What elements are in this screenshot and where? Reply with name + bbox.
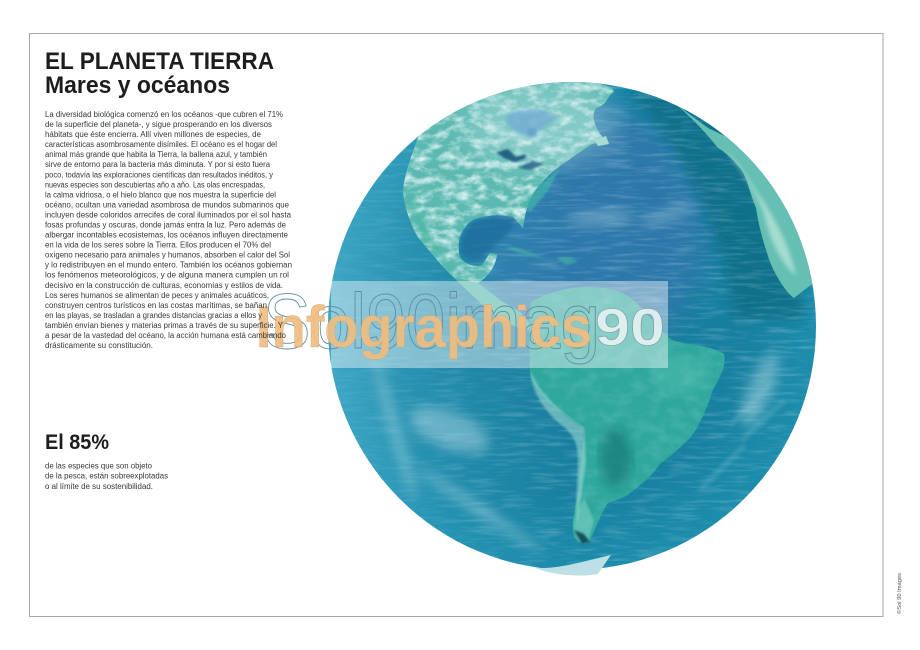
body text: la calma vidriosa, o el hielo blanco que nos muestra la superficie del <box>45 190 276 199</box>
cloud streaks <box>370 199 786 556</box>
body text: incluyen desde coloridos arrecifes de coral iluminados por el sol hasta <box>45 210 292 220</box>
Central America <box>453 277 535 330</box>
photo credit: ©Sol 90 Images <box>896 573 903 614</box>
body text: Los seres humanos se alimentan de peces y animales acuáticos, <box>45 291 269 300</box>
body text: hábitats que éste encierra. Allí viven millones de especies, de <box>45 130 261 139</box>
Andes coast light <box>530 370 586 524</box>
west coast green <box>403 190 460 282</box>
body text: decisivo en la construcción de culturas, economías y estilos de vida. <box>45 281 283 290</box>
watermark orange wordmark: Infographics <box>256 295 592 360</box>
Cuba and Caribbean <box>506 247 578 265</box>
lower right light streaks <box>700 385 785 490</box>
body text: poco, todavía las exploraciones científicas dan resultados inéditos, y <box>45 170 273 179</box>
Africa and Europe limb <box>678 106 812 298</box>
North America <box>400 80 620 290</box>
watermark white numerals: 90 <box>595 299 665 357</box>
statistic heading: El 85% <box>45 431 109 454</box>
title <box>45 48 274 99</box>
body text: nuevas especies son descubiertas año a año. Las olas encrespadas, <box>45 180 265 189</box>
Antarctica <box>535 555 611 576</box>
body text: albergar incontables ecosistemas, los océanos influyen directamente <box>45 230 288 240</box>
body text: a pesar de la vastedad del océano, la acción humana está cambiando <box>45 331 287 340</box>
body text: en las playas, se trasladan a grandes distancias gracias a ellos y <box>45 311 262 320</box>
body text: de la superficie del planeta-, y sigue prosperando en los diversos <box>45 120 272 129</box>
statistic caption <box>45 462 168 491</box>
body text: La diversidad biológica comenzó en los océanos -que cubren el 71% <box>45 110 283 119</box>
body text <box>45 110 292 350</box>
body text: características asombrosamente disímiles. El océano es el hogar del <box>45 140 277 149</box>
Newfoundland <box>594 136 609 146</box>
statistic caption: o al límite de su sostenibilidad. <box>45 482 153 491</box>
body text: animal más grande que habita la Tierra, la ballena azul, y también <box>45 150 267 159</box>
body text: océano, ocultan una variedad asombrosa de mundos submarinos que <box>45 200 289 209</box>
body text: fosas profundas y oscuras, donde jamás entra la luz. Pero además de <box>45 220 286 230</box>
body text: construyen centros turísticos en las costas marítimas, se bañan <box>45 301 267 310</box>
South America <box>525 285 730 547</box>
terminator shadow band <box>625 85 805 320</box>
title: Mares y océanos <box>45 72 230 99</box>
ocean wave texture <box>328 82 816 570</box>
body text: en la vida de los seres sobre la Tierra. Ellos producen el 70% del <box>45 241 271 250</box>
body text: sirve de entorno para la bacteria más diminuta. Y por si esto fuera <box>45 160 271 169</box>
forest shadow <box>600 428 632 488</box>
watermark <box>256 277 668 368</box>
statistic caption: de las especies que son objeto <box>45 462 153 470</box>
body text: también envían bienes y materias primas a través de su superficie. Y <box>45 321 284 330</box>
Hudson Bay <box>506 109 558 138</box>
body text: oxígeno necesario para animales y humanos, absorben el calor del Sol <box>45 251 290 260</box>
title: EL PLANETA TIERRA <box>45 48 274 75</box>
pale northern wash <box>465 83 615 167</box>
Gulf of Mexico <box>461 217 513 260</box>
body text: los fenómenos meteorológicos, y de alguna manera cumplen un rol <box>45 271 289 280</box>
body text: drásticamente su constitución. <box>45 341 153 350</box>
body text: y lo redistribuyen en el mundo entero. También los océanos gobiernan <box>45 261 292 270</box>
coastal glow <box>523 168 560 212</box>
statistic caption: de la pesca, están sobreexplotadas <box>45 472 168 481</box>
left limb light <box>328 125 502 555</box>
watermark panel <box>331 281 668 368</box>
central blue ocean glow <box>477 106 712 328</box>
Great Lakes <box>496 149 526 162</box>
watermark outlined wordmark: Sol90imag <box>263 277 600 365</box>
globe <box>328 80 816 576</box>
